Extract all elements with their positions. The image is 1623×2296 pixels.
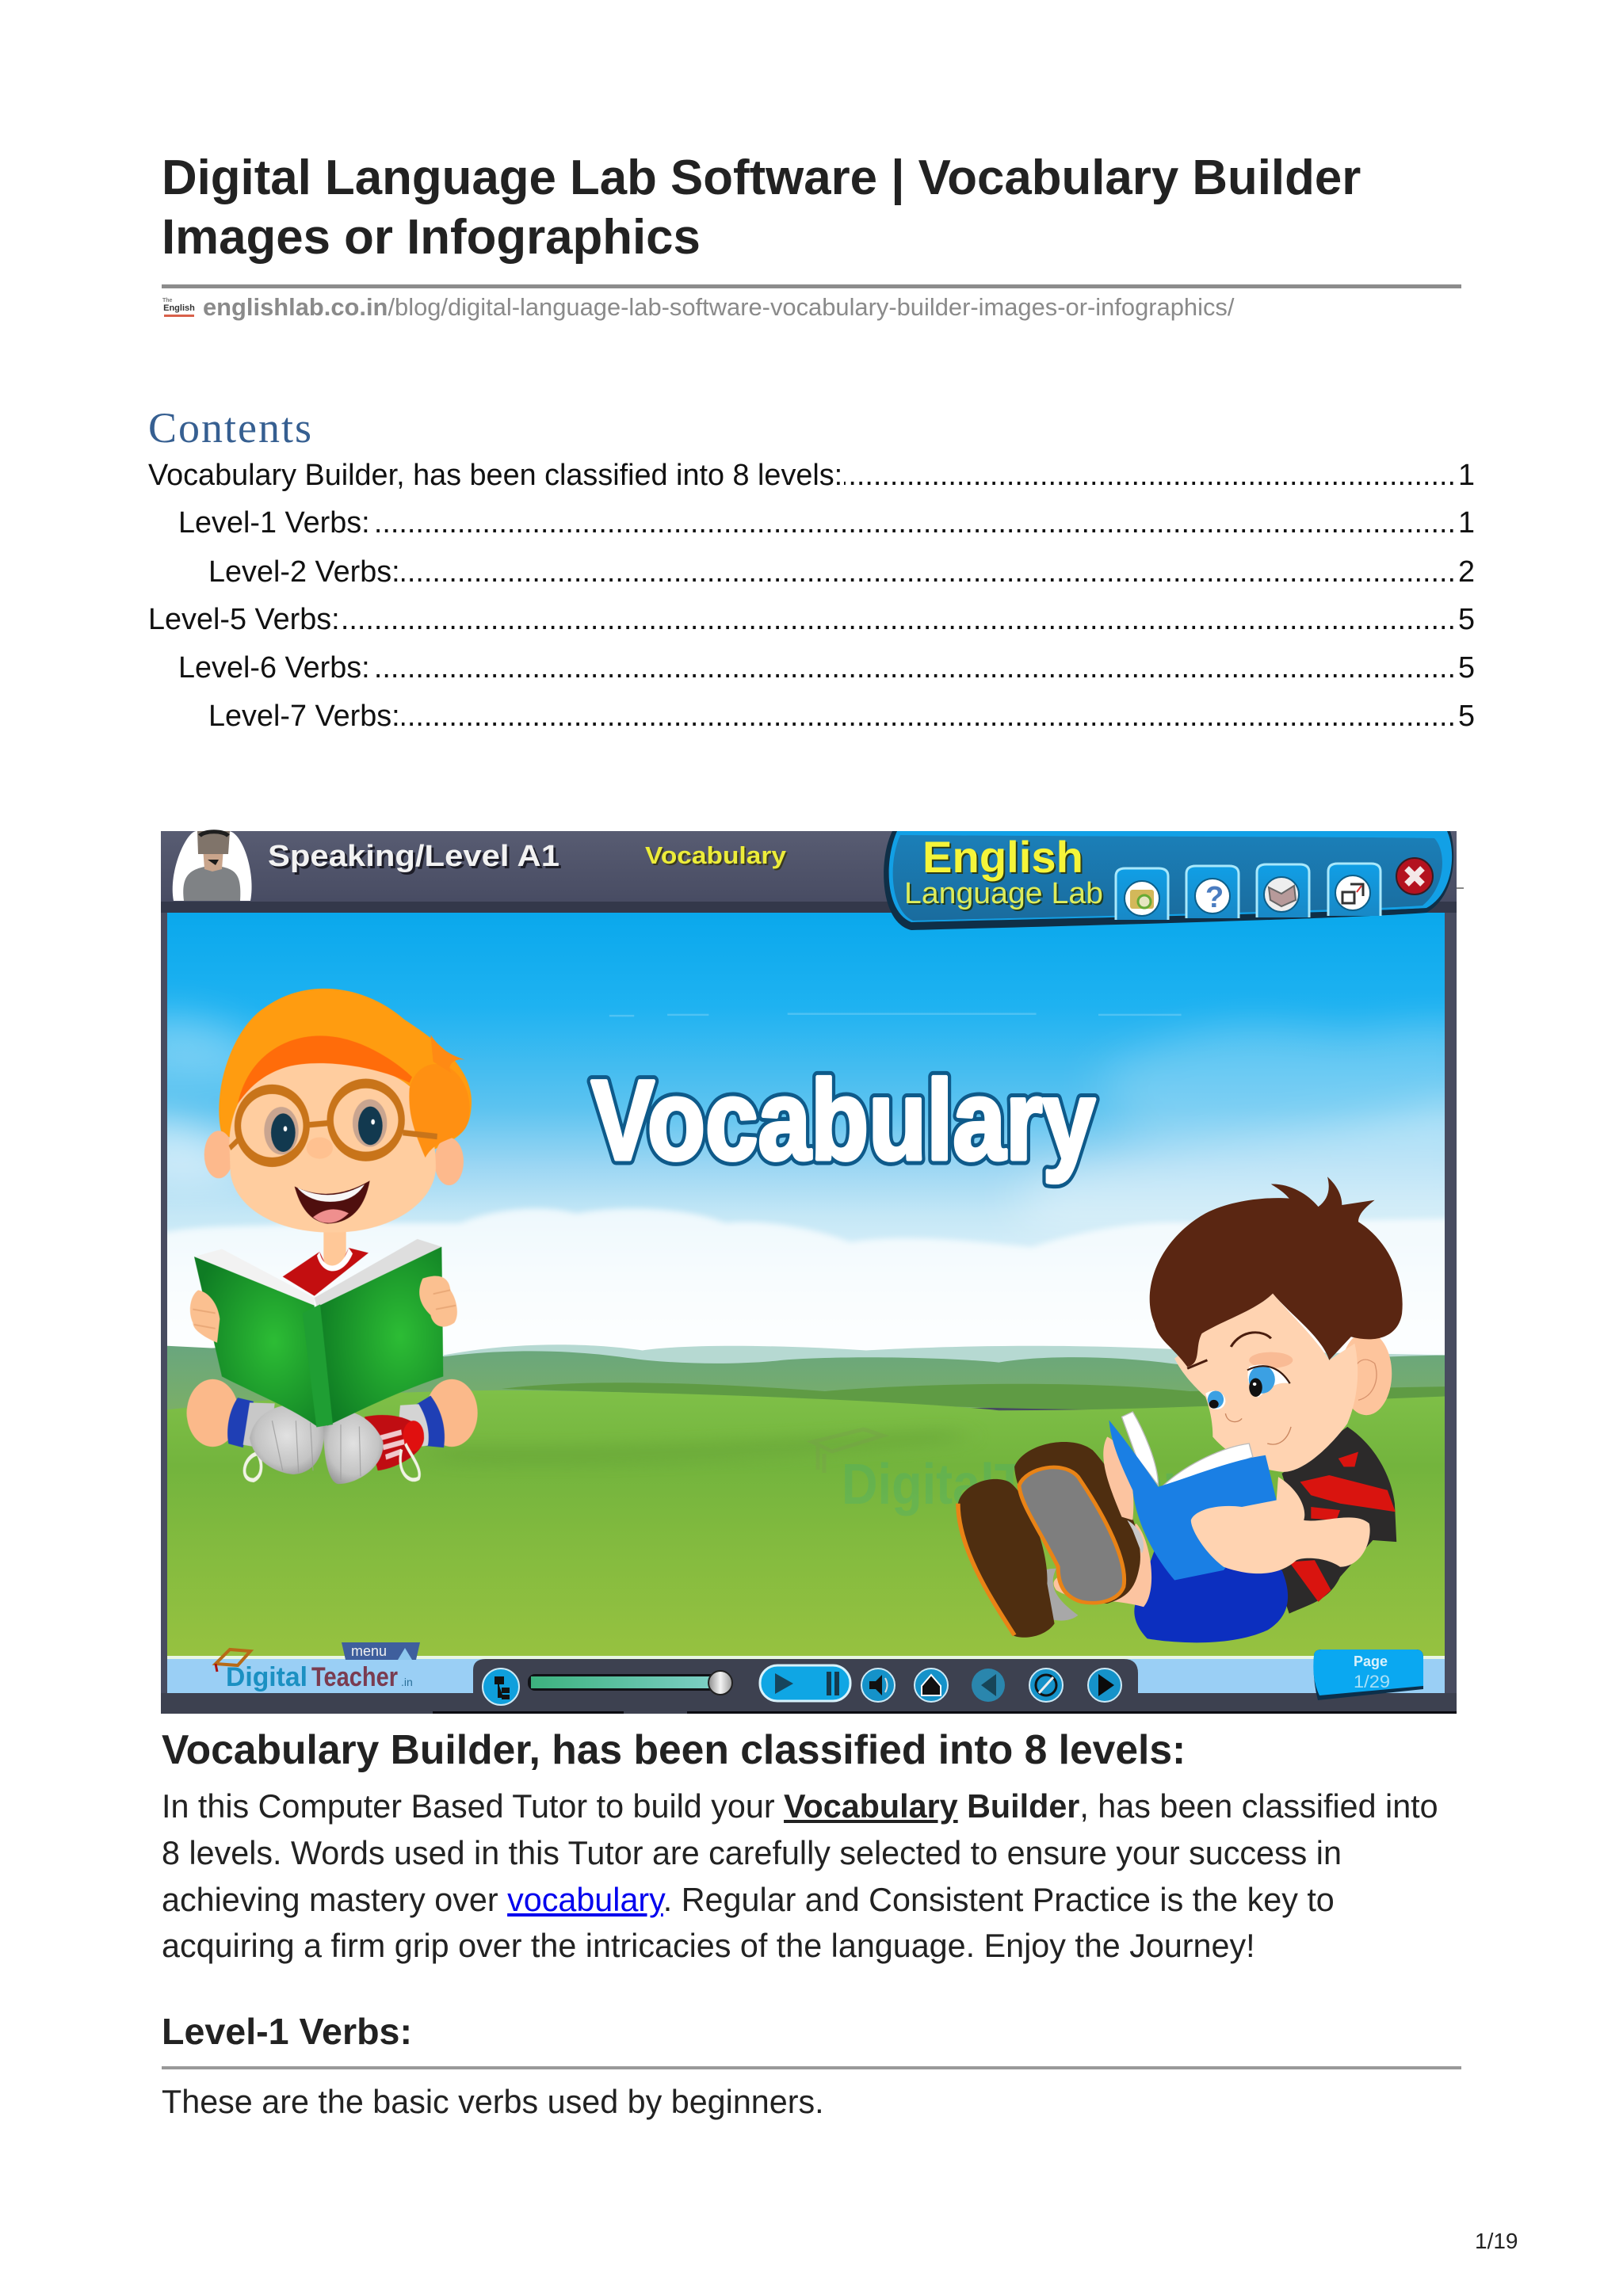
English Language Lab panel: Language Lab: [904, 877, 1103, 910]
toc entry 1: 1: [1458, 459, 1475, 492]
icon: outline: [483, 1669, 519, 1705]
source icon: English Language Lab favicon: The: [162, 298, 172, 303]
background scenery: [167, 995, 1445, 1656]
icon: sound: [861, 1669, 895, 1702]
toc entry 6: Level-7 Verbs:: [208, 700, 400, 733]
table of contents: [148, 459, 1475, 733]
toc entry 3: Level-2 Verbs:: [208, 555, 400, 589]
top title bar: Speaking/Level A1: [268, 840, 559, 873]
shoes: [250, 1405, 324, 1474]
source icon: English Language Lab favicon: [162, 298, 195, 317]
sky: [167, 913, 1445, 1356]
page indicator: Page: [1354, 1653, 1388, 1669]
ear: [1341, 1332, 1392, 1415]
hair: [1150, 1177, 1403, 1367]
shirt: [1274, 1427, 1396, 1614]
book: [1109, 1421, 1277, 1581]
progress slider: [528, 1671, 732, 1695]
watermark: [812, 1429, 1182, 1516]
mouth: [295, 1180, 370, 1223]
shorts: [1134, 1550, 1288, 1642]
toc entry 5: Level-6 Verbs:: [178, 651, 370, 685]
presenter avatar: [173, 831, 252, 901]
page indicator: [1313, 1650, 1423, 1700]
Vocabulary heading: Vocabulary: [591, 1058, 1095, 1184]
laces and red shoe: [365, 1415, 424, 1470]
distant hills: [444, 1344, 1455, 1391]
title: Digital Language Lab Software | Vocabulary Builder: [162, 151, 1361, 205]
Vocabulary heading: Vocabulary: [591, 1058, 1095, 1184]
title rule: [162, 284, 1461, 288]
icon: next: [1088, 1669, 1121, 1702]
level 1 text: These are the basic verbs used by beginners.: [162, 2084, 824, 2120]
ears: [204, 1131, 233, 1178]
logo: Digital Teacher: .in: [401, 1676, 413, 1688]
intro paragraph: [162, 1788, 1438, 1964]
book pages: [1122, 1412, 1158, 1486]
level 1 heading: Level-1 Verbs:: [162, 2011, 412, 2052]
face: [229, 1062, 436, 1233]
top title bar: [161, 831, 1457, 913]
hair lock: [409, 1064, 469, 1158]
shirt: [283, 1248, 369, 1296]
menu tab: menu: [351, 1643, 387, 1659]
title: Images or Infographics: [162, 210, 701, 265]
media controls panel: [473, 1659, 1138, 1711]
level label: Speaking/Level A1: [270, 842, 562, 875]
icon: previous: [972, 1669, 1005, 1702]
icon: help: ?: [1205, 881, 1224, 914]
toolbar tabs: [1116, 864, 1381, 920]
front shoe: [1014, 1442, 1140, 1604]
icon: window: [1335, 875, 1370, 910]
icon: help: [1195, 879, 1230, 914]
rear shoe: [958, 1479, 1055, 1638]
title: [162, 151, 1361, 265]
toc entry 2: 1: [1458, 506, 1475, 540]
source icon: English Language Lab favicon: English: [163, 303, 195, 313]
toc entry 3: 2: [1458, 555, 1475, 589]
intro paragraph: achieving mastery over vocabulary. Regular and Consistent Practice is the key to: [162, 1882, 1335, 1918]
watermark: DigitalTeacher: [842, 1453, 1182, 1516]
nose: [307, 1137, 333, 1159]
soft high clouds: [128, 1014, 1488, 1228]
logo: Digital Teacher: Teacher: [311, 1662, 398, 1692]
illustration: red-haired boy with green book: [187, 989, 478, 1484]
logo: Digital Teacher: Digital: [226, 1662, 307, 1692]
contents heading: Contents: [148, 404, 313, 452]
window frame: [161, 831, 1457, 1714]
legs: [187, 1379, 239, 1447]
left eye: [1205, 1390, 1225, 1409]
icon: close: [1396, 858, 1433, 894]
neck: [323, 1230, 346, 1267]
top title bar: Vocabulary: [645, 841, 787, 869]
play and pause button: [760, 1665, 850, 1701]
source URL: englishlab.co.in/blog/digital-language-lab-software-vocabulary-builder-images-or-infographics/: [203, 293, 1234, 321]
English Language Lab panel: English: [922, 832, 1083, 882]
book covers: [194, 1257, 317, 1426]
toc entry 1: Vocabulary Builder, has been classified into 8 levels:: [148, 459, 842, 492]
eyes: [264, 1107, 299, 1154]
back leg: [1054, 1524, 1151, 1607]
icon: folder: [1125, 881, 1159, 916]
grass: [162, 1390, 1455, 1660]
logo: Digital Teacher: [216, 1650, 413, 1692]
hands: [190, 1290, 220, 1343]
toc entry 4: Level-5 Verbs:: [148, 603, 340, 636]
bottom control strip: [161, 1642, 1457, 1714]
book pages: [194, 1249, 315, 1307]
right eye: [1247, 1364, 1290, 1398]
hair back: [219, 989, 472, 1154]
icon: home: [915, 1669, 948, 1702]
socks: [227, 1398, 254, 1447]
toc entry 6: 5: [1458, 700, 1475, 733]
eye shadows: [1249, 1352, 1293, 1368]
toc entry 2: Level-1 Verbs:: [178, 506, 370, 540]
software screenshot illustration: [161, 830, 1464, 1714]
low clouds: [162, 1208, 1455, 1353]
toc entry 5: 5: [1458, 651, 1475, 685]
toc entry 4: 5: [1458, 603, 1475, 636]
English Language Lab panel: English: [924, 833, 1085, 883]
English Language Lab panel: [884, 831, 1453, 930]
hand behind book: [1103, 1437, 1133, 1520]
level 1 rule: [162, 2066, 1461, 2069]
icon: replay: [1029, 1669, 1063, 1702]
face: [1174, 1294, 1358, 1472]
intro paragraph: acquiring a firm grip over the intricacies of the language. Enjoy the Journey!: [162, 1928, 1255, 1964]
intro paragraph: In this Computer Based Tutor to build your Vocabulary Builder, has been classified into: [162, 1788, 1438, 1825]
illustration: brown-haired boy with blue book: [958, 1177, 1403, 1642]
page indicator: 1/29: [1354, 1672, 1390, 1691]
icon: book: [1264, 877, 1299, 912]
intro paragraph: 8 levels. Words used in this Tutor are carefully selected to ensure your success in: [162, 1835, 1342, 1871]
hands: [1191, 1477, 1370, 1573]
page number: 1/19: [1475, 2229, 1518, 2253]
glasses: [238, 1084, 402, 1162]
menu tab: [342, 1642, 420, 1660]
section heading: Vocabulary Builder, has been classified into 8 levels:: [162, 1726, 1186, 1772]
English Language Lab panel: Language Lab: [906, 879, 1105, 912]
nose and smile: [1225, 1413, 1291, 1444]
section label: Vocabulary: [647, 843, 789, 871]
